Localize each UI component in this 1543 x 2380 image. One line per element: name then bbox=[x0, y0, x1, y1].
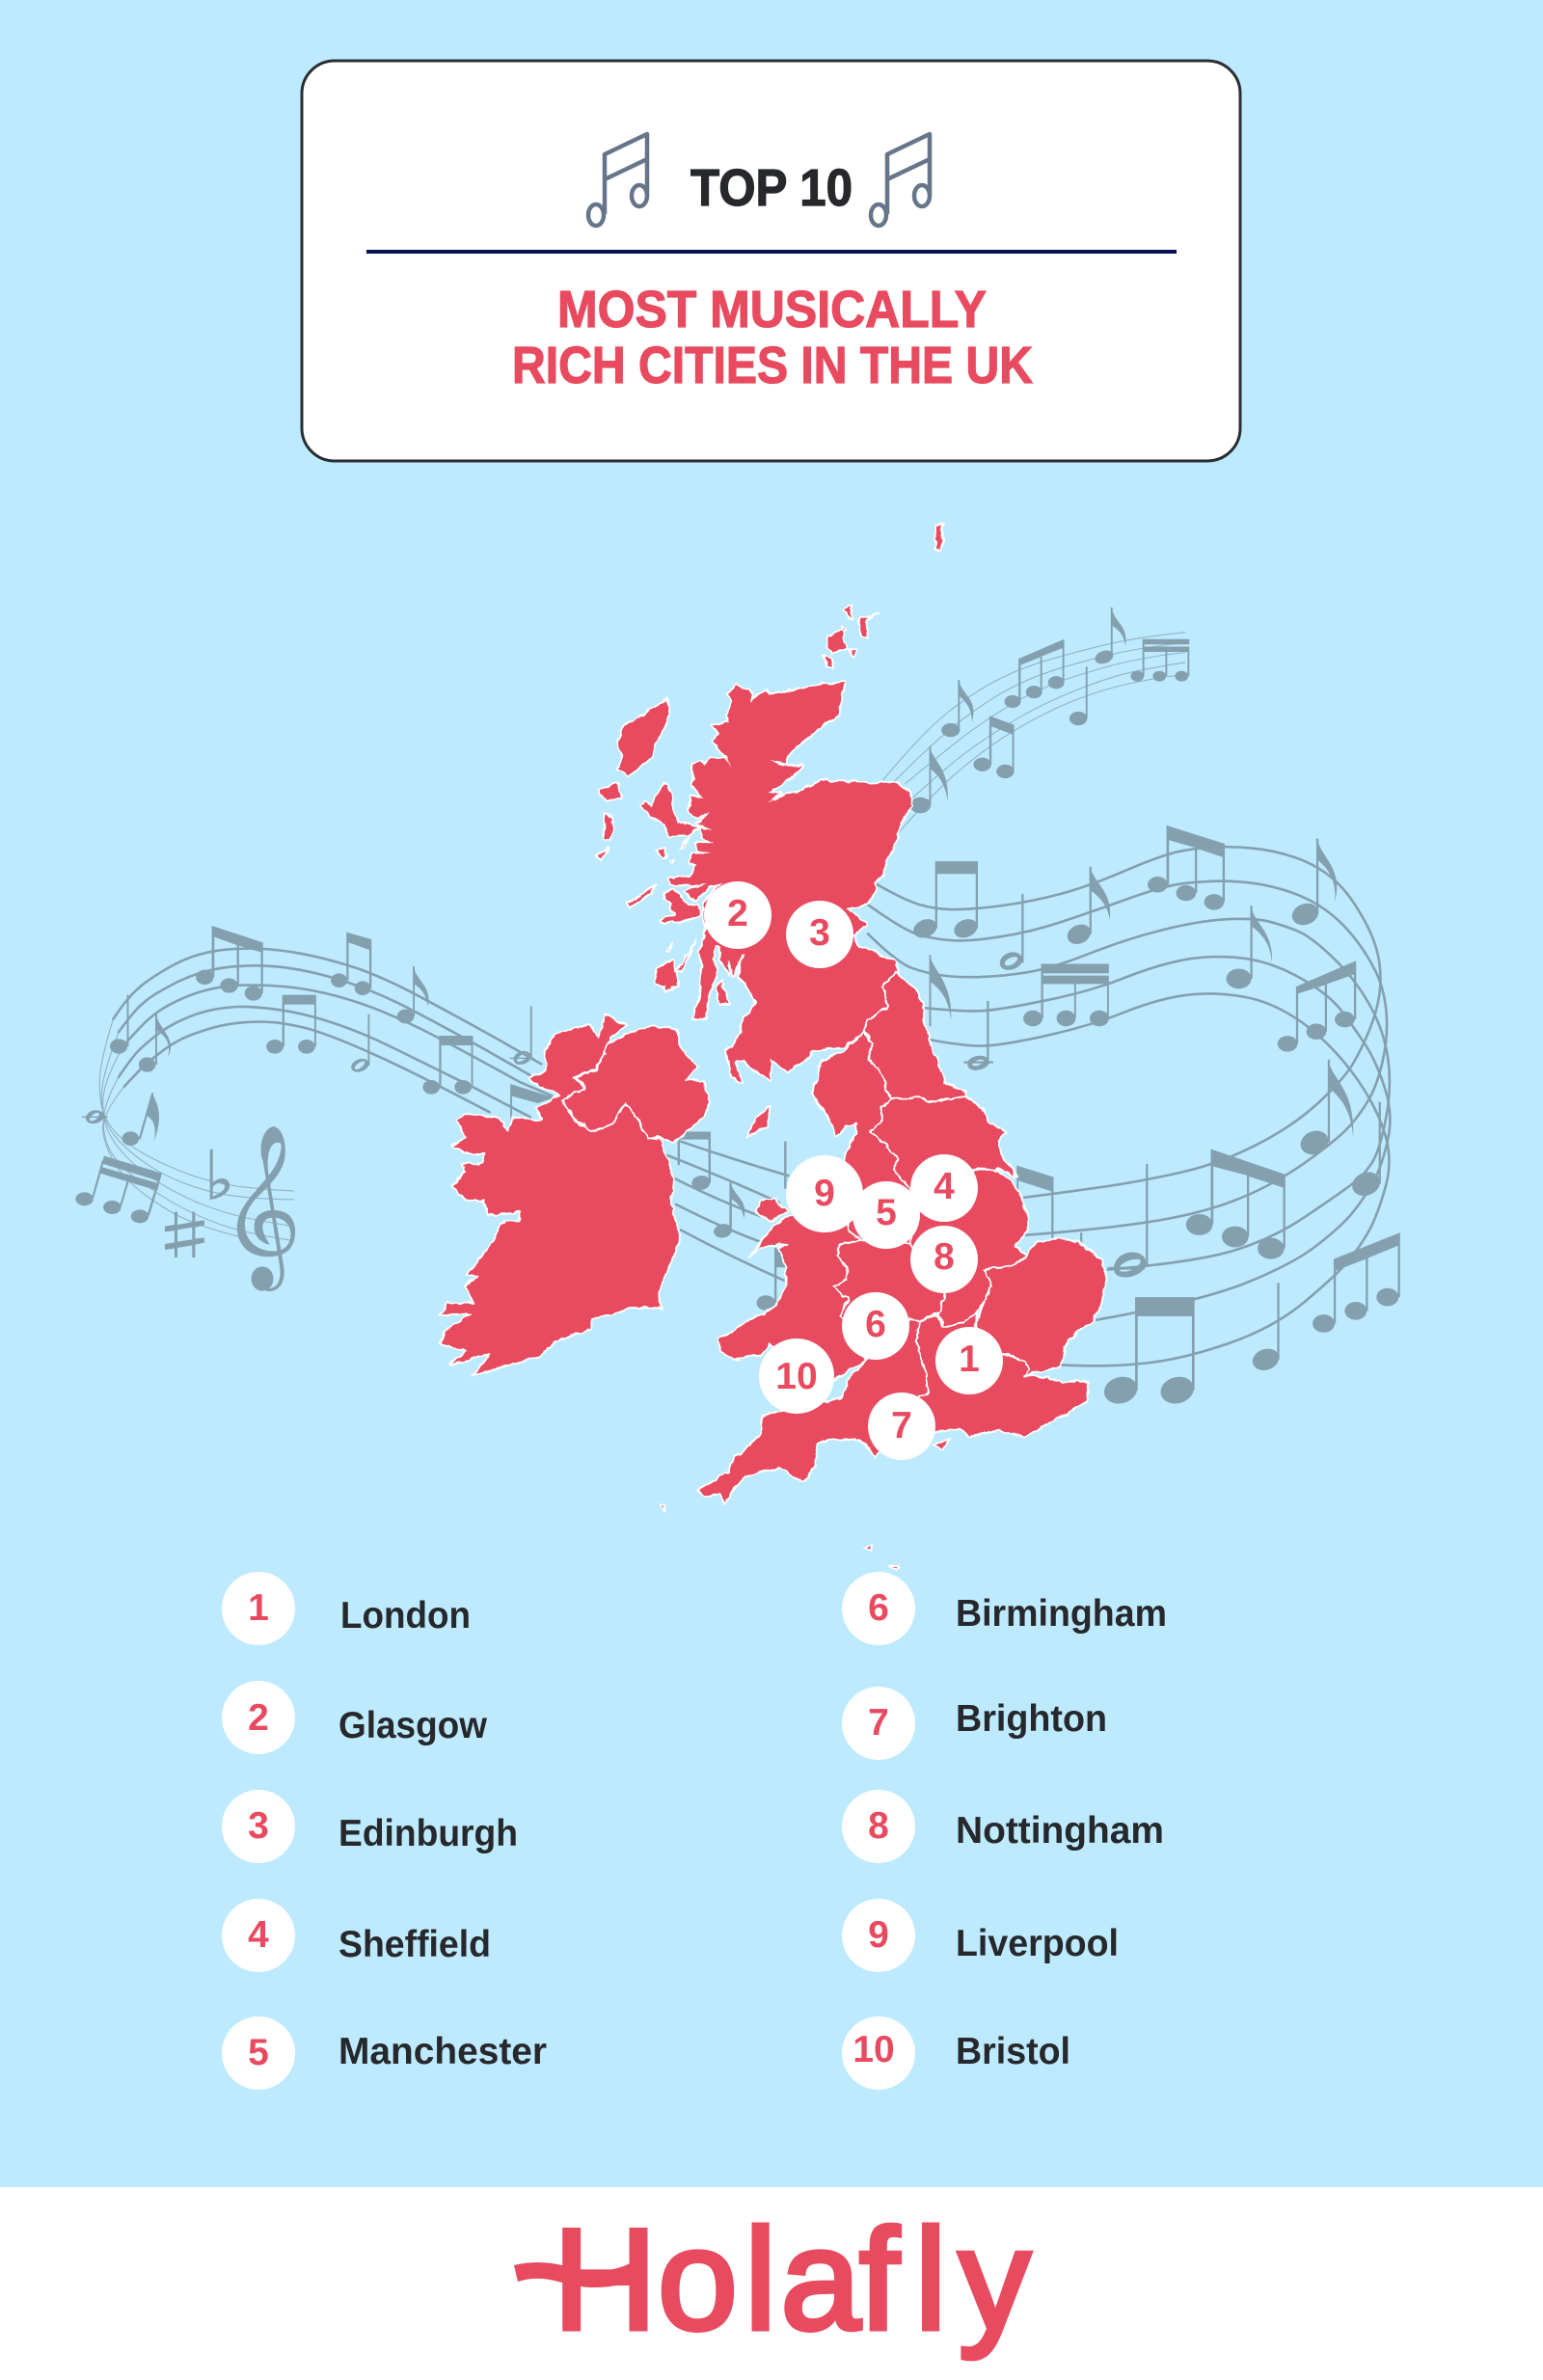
map marker 8 bbox=[910, 1226, 978, 1293]
arran bbox=[716, 981, 730, 1006]
region: east midlands bbox=[910, 1169, 1029, 1327]
map marker 6: 6 bbox=[865, 1304, 886, 1345]
map marker 5: 5 bbox=[876, 1192, 897, 1233]
legend: right column bbox=[842, 1572, 1167, 2090]
map marker 8: 8 bbox=[934, 1236, 955, 1278]
west highlands and argyll bbox=[670, 759, 765, 1019]
south uist bbox=[604, 812, 613, 840]
legend item 5: 5 bbox=[248, 2032, 269, 2073]
region: yorkshire bbox=[870, 1096, 1017, 1189]
icon: music note right bbox=[871, 134, 930, 226]
icon: sharp sign bbox=[165, 1212, 204, 1258]
map marker 2: 2 bbox=[727, 893, 748, 934]
music staff: irish sea section bbox=[663, 1131, 788, 1311]
map marker 10 bbox=[759, 1339, 834, 1414]
subtitle: RICH CITIES IN THE UK bbox=[512, 337, 1033, 394]
staff lines bbox=[99, 949, 556, 1241]
map: scotland fill seam cover bbox=[670, 684, 911, 1083]
notes bbox=[912, 825, 1400, 1406]
legend item 3 bbox=[222, 1790, 518, 1863]
map marker 9 bbox=[786, 1155, 863, 1232]
legend: left column bbox=[222, 1572, 547, 2090]
legend item 4: Sheffield bbox=[338, 1924, 491, 1965]
channel islands bbox=[865, 1544, 898, 1570]
map marker 3 bbox=[786, 901, 853, 968]
map marker 4: 4 bbox=[934, 1166, 955, 1207]
northern ireland bbox=[561, 1025, 709, 1144]
map marker 5 bbox=[853, 1181, 920, 1249]
shetland bbox=[843, 605, 879, 637]
notes bbox=[75, 926, 555, 1223]
legend item 1: 1 bbox=[248, 1587, 269, 1629]
region: north east england bbox=[863, 972, 966, 1102]
heading: top 10: TOP 10 bbox=[690, 159, 853, 217]
legend item 6 bbox=[842, 1572, 1167, 1645]
legend item 7: 7 bbox=[868, 1702, 889, 1744]
legend item 2 bbox=[222, 1681, 488, 1754]
legend item 9: Liverpool bbox=[956, 1923, 1119, 1964]
map marker 1 bbox=[935, 1327, 1003, 1394]
legend item 7 bbox=[842, 1687, 1107, 1760]
jura bbox=[677, 940, 696, 971]
icon: music note left bbox=[588, 134, 647, 226]
legend item 4 bbox=[222, 1899, 491, 1972]
card background bbox=[302, 61, 1240, 461]
scilly isles bbox=[662, 1504, 665, 1511]
legend item 9: 9 bbox=[868, 1914, 889, 1956]
region: south west england bbox=[697, 1318, 929, 1504]
map marker 2 bbox=[704, 881, 772, 949]
region: west midlands bbox=[833, 1240, 945, 1360]
republic of ireland bbox=[438, 1014, 681, 1376]
coll and tiree bbox=[627, 884, 655, 908]
legend item 8: Nottingham bbox=[956, 1810, 1164, 1852]
map: england, wales and ireland regions bbox=[438, 972, 1107, 1570]
legend item 6: 6 bbox=[868, 1587, 889, 1629]
legend item 3: Edinburgh bbox=[338, 1813, 518, 1854]
subtitle bbox=[512, 281, 1033, 394]
map marker 1: 1 bbox=[959, 1339, 980, 1380]
icon: flat sign bbox=[210, 1149, 230, 1200]
legend item 4: 4 bbox=[248, 1914, 269, 1956]
islay bbox=[654, 960, 678, 991]
legend item 10 bbox=[842, 2016, 1070, 2090]
subtitle: MOST MUSICALLY bbox=[557, 281, 987, 338]
anglesey bbox=[756, 1199, 788, 1222]
small isle near skye bbox=[680, 836, 690, 849]
region: east of england bbox=[975, 1238, 1107, 1376]
legend item 6: Birmingham bbox=[956, 1593, 1167, 1635]
north uist bbox=[598, 783, 620, 800]
map: scotland and northern islands bbox=[594, 525, 943, 1083]
legend item 1: London bbox=[340, 1595, 471, 1636]
map marker 3: 3 bbox=[809, 912, 830, 954]
colonsay bbox=[667, 942, 672, 952]
legend item 10: Bristol bbox=[956, 2031, 1070, 2072]
mull bbox=[659, 889, 701, 924]
legend item 5 bbox=[222, 2016, 547, 2090]
map marker 10: 10 bbox=[775, 1356, 818, 1397]
map marker 4 bbox=[910, 1154, 978, 1222]
footer band bbox=[0, 2187, 1543, 2380]
faint staff lines bbox=[882, 633, 1185, 836]
map of the british isles bbox=[438, 525, 1107, 1570]
map marker 9: 9 bbox=[814, 1173, 835, 1214]
legend item 8: 8 bbox=[868, 1805, 889, 1847]
legend item 1 bbox=[222, 1572, 471, 1645]
northern isle bbox=[934, 525, 943, 551]
region: south east england bbox=[914, 1311, 1090, 1437]
music staff: right ribbon bbox=[868, 825, 1400, 1406]
legend item 3: 3 bbox=[248, 1805, 269, 1847]
isle of man bbox=[746, 1106, 770, 1138]
legend item 10: 10 bbox=[853, 2029, 895, 2070]
legend item 2: 2 bbox=[248, 1697, 269, 1739]
orkney bbox=[824, 626, 856, 666]
isle of wight bbox=[934, 1439, 950, 1450]
title card bbox=[302, 61, 1240, 461]
map marker 7 bbox=[868, 1393, 935, 1460]
staff lines bbox=[868, 847, 1390, 1366]
legend item 9 bbox=[842, 1899, 1119, 1972]
legend item 7: Brighton bbox=[956, 1698, 1107, 1740]
legend item 8 bbox=[842, 1790, 1164, 1863]
scotland highlands and south bbox=[712, 684, 911, 1083]
map marker 6 bbox=[842, 1292, 909, 1360]
rum bbox=[657, 848, 667, 858]
legend item 5: Manchester bbox=[338, 2031, 547, 2072]
region: wales bbox=[718, 1208, 865, 1382]
upper notes bbox=[910, 608, 1189, 813]
region: north west england bbox=[812, 1033, 914, 1244]
legend item 2: Glasgow bbox=[338, 1705, 488, 1746]
music staff: upper right ribbon bbox=[882, 608, 1189, 836]
eigg bbox=[670, 860, 674, 865]
logo: holafly: Holafly bbox=[554, 2199, 1031, 2360]
lewis and harris bbox=[617, 698, 671, 777]
barra bbox=[594, 848, 609, 859]
map marker 7: 7 bbox=[891, 1405, 912, 1447]
icon: treble clef bbox=[237, 1126, 295, 1291]
skye bbox=[639, 783, 699, 837]
map: scottish west coast and inner hebrides bbox=[627, 759, 765, 1019]
music staff: left ribbon bbox=[75, 926, 556, 1291]
